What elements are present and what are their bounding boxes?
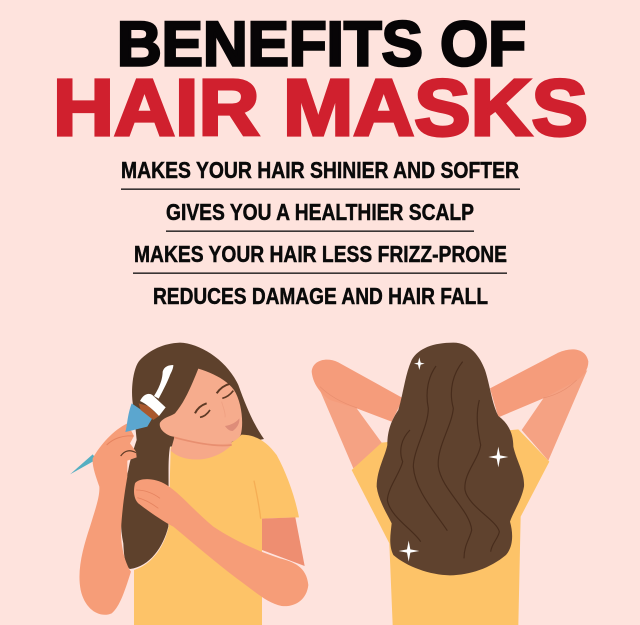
nose xyxy=(222,402,225,417)
face xyxy=(160,369,242,444)
benefit: healthier scalp: GIVES YOU A HEALTHIER SCALP xyxy=(166,199,474,225)
illustration: woman from behind with shiny hair xyxy=(312,343,588,625)
sparkle top xyxy=(414,357,425,370)
right upper arm xyxy=(490,349,588,417)
long wavy hair xyxy=(377,343,524,575)
raised arm and hand xyxy=(79,423,137,615)
hair mask on bristles xyxy=(139,403,159,420)
mouth xyxy=(225,418,239,431)
lower arm and hand xyxy=(134,479,308,606)
shaded under-sleeve xyxy=(262,517,305,566)
sparkle right xyxy=(488,447,508,467)
left arm fold xyxy=(320,387,357,408)
closed eyes xyxy=(195,384,233,417)
finger lines xyxy=(121,451,136,456)
title: benefits of: BENEFITS OF xyxy=(117,10,526,80)
sparkle bottom xyxy=(399,541,419,562)
hair back xyxy=(121,343,264,569)
left forearm xyxy=(313,373,383,468)
right forearm xyxy=(522,370,587,461)
neck shadow xyxy=(174,437,232,446)
title: hair masks: HAIR MASKS xyxy=(53,63,588,152)
hand finger creases xyxy=(136,490,160,508)
illustration: woman applying hair mask xyxy=(70,343,308,625)
neck xyxy=(171,435,232,460)
benefit: shinier and softer: MAKES YOUR HAIR SHINIER AND SOFTER xyxy=(121,157,519,183)
right arm fold xyxy=(543,380,577,398)
hair strands xyxy=(387,362,499,558)
white brush handle xyxy=(154,365,173,399)
yellow t-shirt xyxy=(134,435,299,625)
benefit: reduces damage: REDUCES DAMAGE AND HAIR FALL xyxy=(153,283,488,309)
brush head xyxy=(125,403,153,432)
white hair mask xyxy=(140,394,166,416)
yellow t-shirt xyxy=(352,429,549,625)
left upper arm xyxy=(312,360,403,422)
brush handle xyxy=(70,454,97,474)
benefit: less frizz-prone: MAKES YOUR HAIR LESS FRIZZ-PRONE xyxy=(134,241,507,267)
sleeve fold xyxy=(254,481,261,519)
